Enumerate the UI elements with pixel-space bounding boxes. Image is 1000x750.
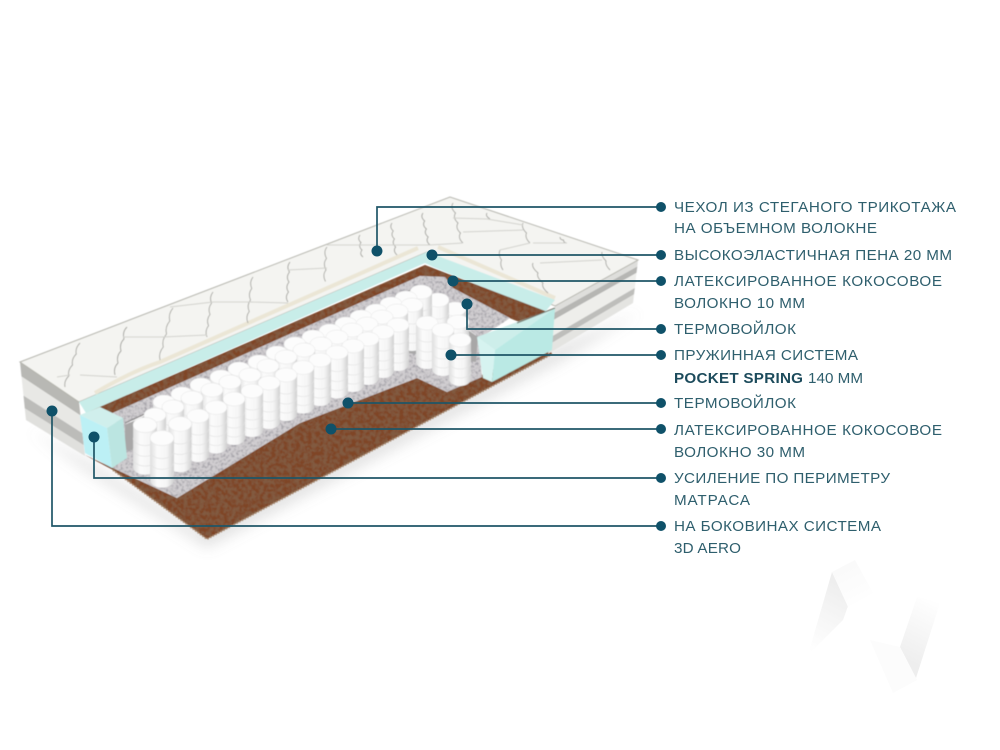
callout: coconut 30 mm bbox=[326, 424, 666, 434]
callout: felt upper bbox=[462, 298, 666, 334]
callout: felt lower bbox=[342, 398, 666, 408]
label: cover: ЧЕХОЛ ИЗ СТЕГАНОГО ТРИКОТАЖА bbox=[674, 199, 957, 216]
label: felt upper: ТЕРМОВОЙЛОК bbox=[674, 320, 796, 338]
label: coconut 10 mm bbox=[674, 273, 942, 312]
label: coconut 30 mm: ВОЛОКНО 30 ММ bbox=[674, 444, 805, 461]
label: spring system bbox=[674, 347, 863, 387]
soft shadow under mattress bbox=[30, 312, 640, 548]
label: perimeter bbox=[674, 470, 890, 509]
left side panel 3D Aero bbox=[20, 362, 85, 456]
label: coconut 30 mm bbox=[674, 422, 942, 461]
label: cover: НА ОБЪЕМНОМ ВОЛОКНЕ bbox=[674, 220, 877, 237]
lower felt layer bbox=[113, 335, 482, 498]
bottom coconut fibre layer bbox=[85, 345, 552, 539]
callout: cover bbox=[372, 202, 666, 256]
pocket springs bbox=[133, 285, 471, 488]
quilting horizontals bbox=[57, 218, 602, 377]
label: perimeter: МАТРАСА bbox=[674, 492, 751, 509]
callout: side panels bbox=[46, 406, 666, 531]
label: coconut 10 mm: ВОЛОКНО 10 ММ bbox=[674, 295, 805, 312]
callout: perimeter bbox=[88, 432, 666, 483]
label: side panels: НА БОКОВИНАХ СИСТЕМА bbox=[674, 518, 882, 535]
watermark logo bbox=[808, 560, 940, 693]
beige edge of the cover cut bbox=[95, 247, 555, 393]
dark line behind springs bbox=[125, 289, 413, 423]
quilted top cover bbox=[20, 197, 638, 402]
label: spring system: 140 ММ bbox=[808, 370, 863, 387]
labels bbox=[674, 199, 957, 557]
coconut fibre fringe bbox=[113, 354, 552, 539]
label: felt lower: ТЕРМОВОЙЛОК bbox=[674, 394, 796, 412]
upper coconut fibre layer bbox=[86, 265, 545, 420]
left perimeter foam block bbox=[80, 407, 127, 468]
callout: coconut 10 mm bbox=[448, 276, 666, 286]
label: side panels bbox=[674, 518, 882, 557]
upper felt layer bbox=[97, 276, 510, 424]
right side panel bbox=[548, 260, 638, 354]
label: perimeter: УСИЛЕНИЕ ПО ПЕРИМЕТРУ bbox=[674, 470, 890, 487]
foam layer strip bbox=[79, 252, 555, 413]
shaded spring cavity bbox=[125, 291, 478, 452]
callout: foam bbox=[426, 250, 666, 260]
callout: spring system bbox=[446, 350, 666, 360]
mattress illustration bbox=[20, 197, 640, 548]
label: spring system: POCKET SPRING bbox=[674, 370, 803, 387]
label: coconut 10 mm: ЛАТЕКСИРОВАННОЕ КОКОСОВОЕ bbox=[674, 273, 942, 290]
label: coconut 30 mm: ЛАТЕКСИРОВАННОЕ КОКОСОВОЕ bbox=[674, 422, 942, 439]
right perimeter foam block bbox=[477, 308, 555, 382]
quilting scallops bbox=[65, 343, 80, 387]
label: spring system: ПРУЖИННАЯ СИСТЕМА bbox=[674, 347, 859, 364]
label: foam: ВЫСОКОЭЛАСТИЧНАЯ ПЕНА 20 ММ bbox=[674, 247, 952, 264]
label: side panels: 3D AERO bbox=[674, 540, 741, 557]
callout lines bbox=[46, 202, 666, 531]
spring cut end row bbox=[416, 316, 471, 386]
spring row middle bbox=[144, 298, 469, 461]
label: cover bbox=[674, 199, 957, 237]
spring row back bbox=[153, 285, 466, 448]
spring row front bbox=[133, 318, 409, 488]
